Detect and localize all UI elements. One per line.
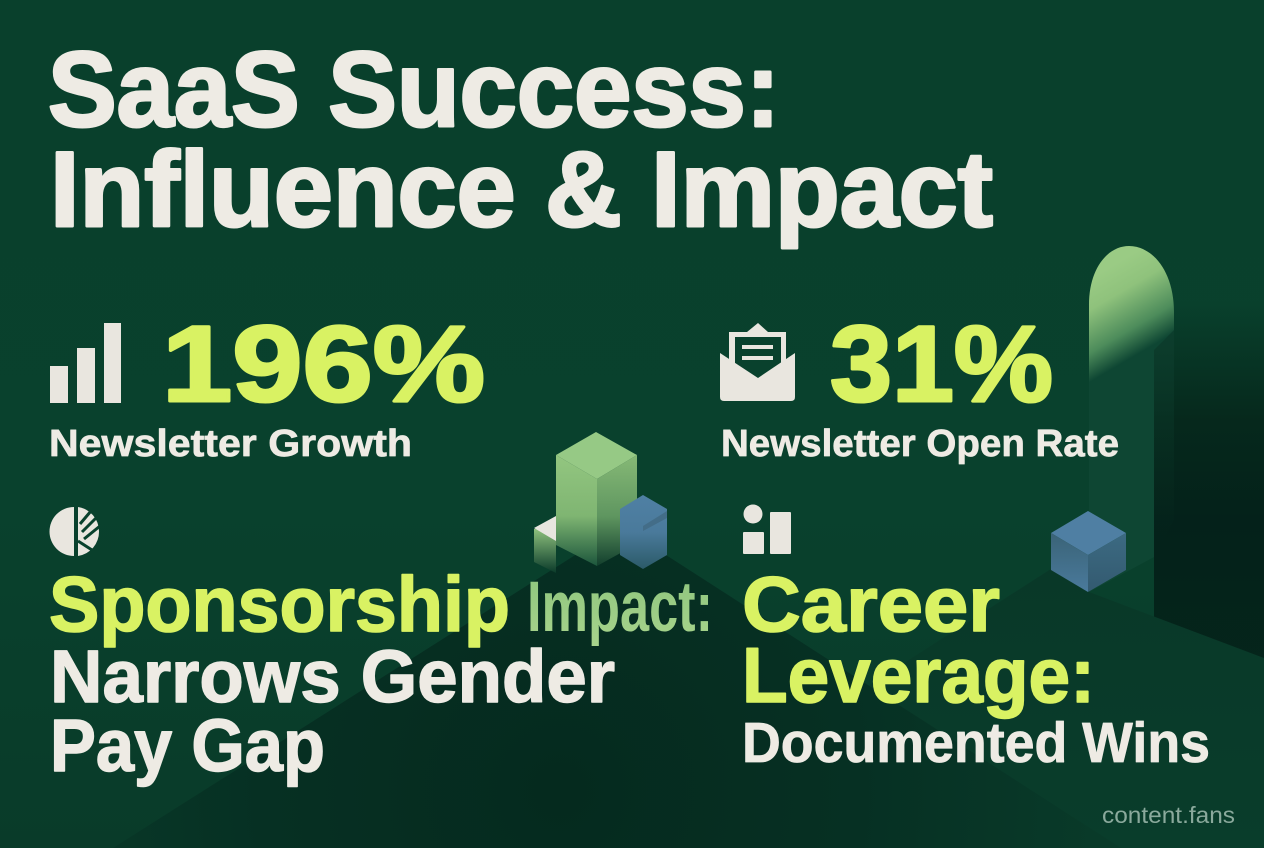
icon: split circle xyxy=(50,507,100,556)
icon: dot and blocks xyxy=(743,504,791,554)
heading: sponsorship impact: Sponsorship xyxy=(49,560,510,648)
heading: sponsorship impact: Narrows Gender xyxy=(50,635,615,718)
stat: newsletter growth xyxy=(49,303,485,465)
stat: newsletter open rate: 31% xyxy=(830,303,1053,424)
title xyxy=(48,29,993,249)
background: centre mountain xyxy=(113,526,1121,848)
icon: open envelope xyxy=(720,323,795,401)
illustration: green and blue blocks xyxy=(534,432,667,573)
heading: career leverage: Leverage: xyxy=(742,631,1095,719)
stat: newsletter growth: Newsletter Growth xyxy=(49,423,412,465)
background: pillar cast shadow xyxy=(1154,300,1264,700)
background: right ridge xyxy=(615,560,1264,848)
heading: career leverage: Documented Wins xyxy=(742,711,1210,775)
stat: newsletter growth: 196% xyxy=(162,303,485,424)
heading: sponsorship impact xyxy=(49,560,713,787)
illustration: rounded pillar xyxy=(1089,246,1174,592)
stat: newsletter open rate: Newsletter Open Rate xyxy=(721,423,1119,465)
heading: sponsorship impact: Pay Gap xyxy=(50,704,325,787)
icon: bar chart xyxy=(50,323,121,403)
title: SaaS Success: xyxy=(48,29,780,149)
heading: sponsorship impact: Impact: xyxy=(527,568,713,647)
heading: career leverage xyxy=(742,560,1210,775)
stat: newsletter open rate xyxy=(721,303,1119,465)
heading: career leverage: Career xyxy=(742,560,1000,648)
illustration: blue cube by pillar xyxy=(1051,511,1126,592)
watermark: content.fans xyxy=(1102,802,1235,828)
title: Influence & Impact xyxy=(50,129,993,249)
